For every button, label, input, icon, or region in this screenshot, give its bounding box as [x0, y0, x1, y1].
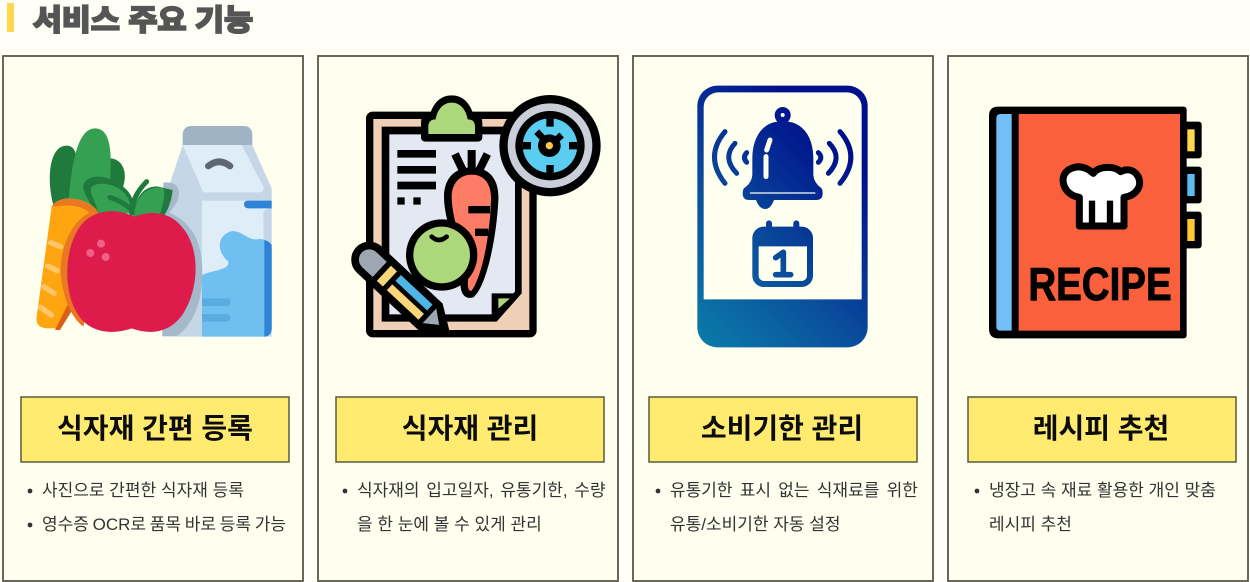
bullet list — [28, 481, 286, 534]
panel: ingredient management — [318, 56, 618, 581]
bullet list: 유통기한 표시 없는 식재료를 위한 — [670, 481, 918, 500]
panel: ingredient registration — [3, 56, 303, 581]
icon: groceries — [36, 126, 272, 337]
icon: phone with bell and calendar — [697, 86, 868, 347]
panel: recipe recommendation — [948, 56, 1248, 581]
panel: expiry management — [633, 56, 933, 581]
heading accent bar — [7, 3, 14, 32]
bullet list: 냉장고 속 재료 활용한 개인 맞춤 — [989, 481, 1216, 500]
title bar: 소비기한 관리 — [701, 413, 863, 444]
bullet list: 레시피 추천 — [989, 515, 1072, 534]
title bar: 레시피 추천 — [1033, 413, 1169, 444]
title bar: 식자재 간편 등록 — [57, 413, 253, 444]
bullet list: 을 한 눈에 볼 수 있게 관리 — [357, 515, 542, 534]
icon: recipe book: RECIPE — [1028, 258, 1172, 310]
title bar — [649, 397, 917, 462]
title bar — [21, 397, 289, 462]
title bar — [336, 397, 604, 462]
icon: clipboard — [345, 95, 601, 347]
bullet list: 유통/소비기한 자동 설정 — [670, 515, 841, 534]
bullet list: 식자재의 입고일자, 유통기한, 수량 — [357, 481, 606, 500]
bullet list — [975, 481, 1216, 534]
bullet list — [656, 481, 918, 534]
title bar: 식자재 관리 — [402, 413, 538, 444]
icon: recipe book — [989, 107, 1202, 338]
heading — [7, 3, 253, 37]
bullet list: 영수증 OCR로 품목 바로 등록 가능 — [42, 515, 286, 534]
heading text: 서비스 주요 기능 — [33, 4, 253, 37]
title bar — [968, 397, 1236, 462]
bullet list — [343, 481, 606, 534]
bullet list: 사진으로 간편한 식자재 등록 — [42, 481, 244, 500]
